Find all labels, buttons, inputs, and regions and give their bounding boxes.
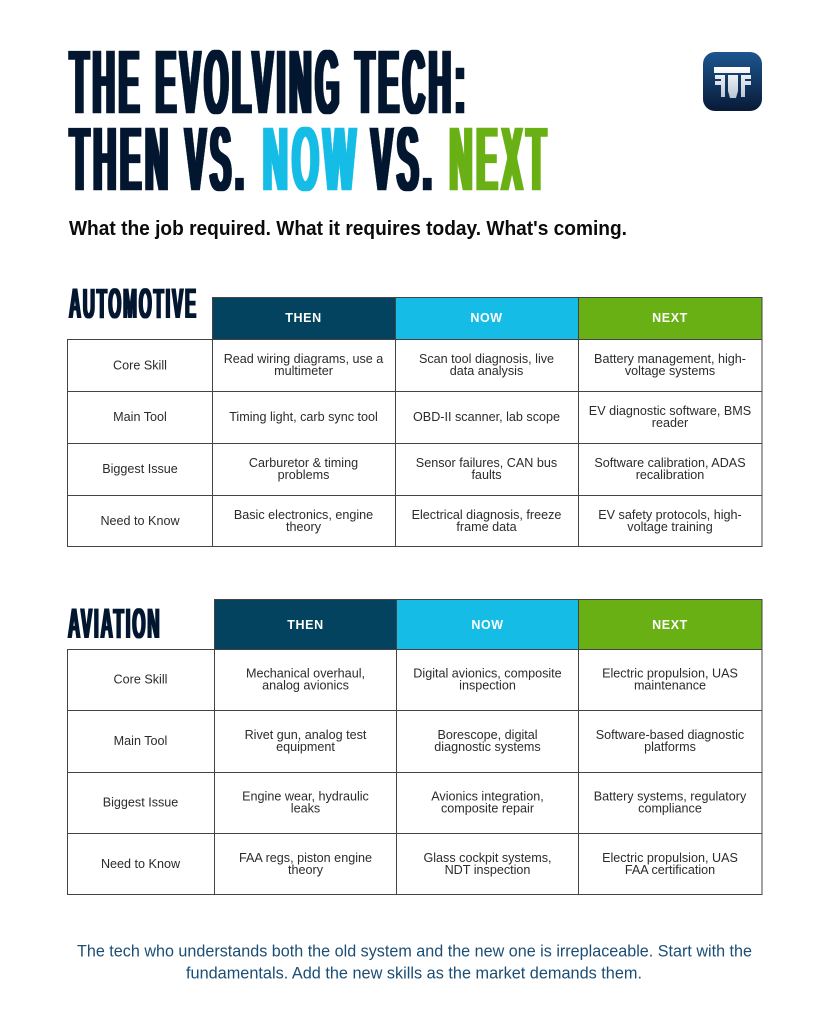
table header: next: [579, 599, 762, 649]
row: biggest issue: Carburetor & timing: [249, 456, 358, 470]
row: need to know: theory: [288, 863, 324, 877]
panel: aviation table: [68, 599, 762, 895]
row: biggest issue: Battery systems, regulatory: [594, 790, 747, 804]
row: biggest issue: Biggest Issue: [102, 462, 178, 476]
row: need to know: EV safety protocols, high-: [598, 508, 742, 522]
row: biggest issue: [102, 456, 746, 482]
row: core skill: Core Skill: [113, 358, 167, 372]
row: core skill: Battery management, high-: [594, 352, 746, 366]
row: main tool: [114, 728, 744, 754]
row: need to know: [101, 851, 738, 877]
table header: next: [578, 297, 762, 339]
row: biggest issue: [103, 790, 747, 816]
row: need to know: Electrical diagnosis, freeze: [412, 508, 561, 522]
title: [70, 30, 550, 211]
title: NOW: [263, 107, 360, 211]
row: main tool: Main Tool: [113, 410, 167, 424]
row: core skill: Read wiring diagrams, use a: [224, 352, 383, 366]
row: need to know: frame data: [456, 520, 517, 534]
row: need to know: Electric propulsion, UAS: [602, 851, 738, 865]
table header: next: NEXT: [652, 311, 688, 325]
row: main tool: Timing light, carb sync tool: [229, 410, 378, 424]
row: biggest issue: leaks: [291, 802, 320, 816]
panel: automotive table: AUTOMOTIVE: [69, 280, 198, 328]
row: core skill: [113, 352, 746, 378]
closing statement: fundamentals. Add the new skills as the market demands them.: [186, 964, 642, 982]
row: need to know: Basic electronics, engine: [234, 508, 373, 522]
table header: next: NEXT: [652, 618, 688, 632]
row: biggest issue: problems: [278, 468, 329, 482]
row: need to know: [100, 508, 742, 534]
row: main tool: diagnostic systems: [434, 740, 541, 754]
row: need to know: NDT inspection: [445, 863, 530, 877]
table header: now: NOW: [470, 311, 503, 325]
row: biggest issue: Software calibration, ADAS: [594, 456, 746, 470]
panel: aviation table: AVIATION: [68, 600, 162, 648]
row: main tool: Main Tool: [114, 734, 167, 748]
row: biggest issue: Avionics integration,: [431, 790, 544, 804]
title: VS.: [371, 107, 436, 211]
row: main tool: OBD-II scanner, lab scope: [413, 410, 560, 424]
row: core skill: Mechanical overhaul,: [246, 666, 365, 680]
icon: TTF logo: [703, 52, 762, 111]
row: main tool: [113, 404, 751, 430]
row: core skill: inspection: [459, 678, 516, 692]
row: biggest issue: composite repair: [441, 802, 534, 816]
table header: then: [214, 599, 397, 649]
row: biggest issue: compliance: [638, 802, 702, 816]
row: need to know: Glass cockpit systems,: [423, 851, 552, 865]
subtitle: What the job required. What it requires today. What's coming.: [69, 218, 627, 240]
row: main tool: platforms: [644, 740, 696, 754]
row: biggest issue: recalibration: [636, 468, 704, 482]
row: biggest issue: Engine wear, hydraulic: [242, 790, 369, 804]
row: biggest issue: Biggest Issue: [103, 796, 178, 810]
table header: now: NOW: [471, 618, 504, 632]
row: need to know: Need to Know: [100, 514, 180, 528]
row: core skill: data analysis: [450, 364, 523, 378]
row: main tool: Borescope, digital: [437, 728, 538, 742]
table header: then: THEN: [285, 311, 322, 325]
row: main tool: reader: [652, 416, 688, 430]
table header: then: [212, 297, 395, 339]
row: biggest issue: faults: [471, 468, 502, 482]
table header: now: [397, 599, 579, 649]
panel: automotive table: [68, 280, 762, 547]
row: core skill: analog avionics: [262, 678, 349, 692]
title: THEN VS.: [70, 107, 248, 211]
closing statement: [77, 942, 752, 982]
row: main tool: Software-based diagnostic: [596, 728, 744, 742]
row: need to know: theory: [286, 520, 322, 534]
row: core skill: multimeter: [274, 364, 333, 378]
table header: now: [395, 297, 578, 339]
row: core skill: maintenance: [634, 678, 706, 692]
row: main tool: EV diagnostic software, BMS: [589, 404, 751, 418]
closing statement: The tech who understands both the old system and the new one is irreplaceable. Start with the: [77, 942, 752, 960]
row: main tool: equipment: [276, 740, 335, 754]
row: biggest issue: Sensor failures, CAN bus: [416, 456, 557, 470]
row: need to know: FAA certification: [625, 863, 715, 877]
row: need to know: Need to Know: [101, 857, 181, 871]
row: need to know: FAA regs, piston engine: [239, 851, 372, 865]
row: core skill: Electric propulsion, UAS: [602, 666, 738, 680]
row: core skill: voltage systems: [625, 364, 715, 378]
text: NEXT: [450, 107, 550, 211]
row: core skill: Digital avionics, composite: [413, 666, 562, 680]
row: core skill: Core Skill: [114, 672, 167, 686]
row: core skill: [114, 666, 738, 692]
row: core skill: Scan tool diagnosis, live: [419, 352, 554, 366]
row: main tool: Rivet gun, analog test: [245, 728, 367, 742]
row: need to know: voltage training: [627, 520, 713, 534]
table header: then: THEN: [287, 618, 324, 632]
